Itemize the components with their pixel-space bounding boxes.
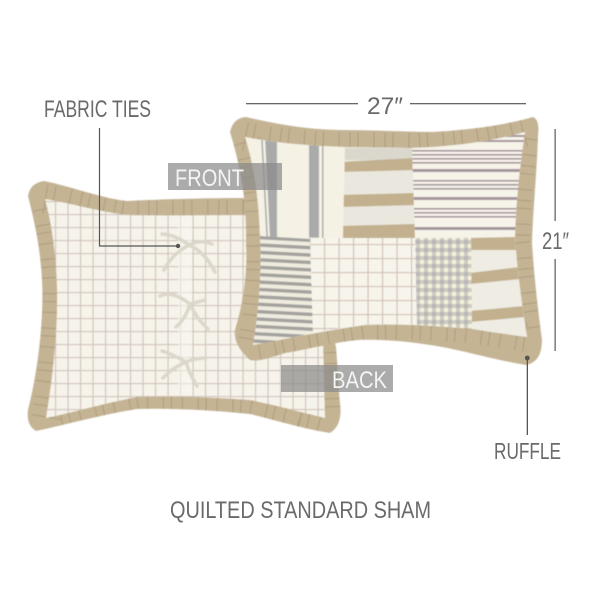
patch base [245,132,527,345]
patch: vertical grey stripes [260,140,340,238]
back pillow [28,181,341,433]
label: back [281,365,393,394]
back ruffle [28,181,341,433]
fabric tie 2 [160,294,208,329]
caption: QUILTED STANDARD SHAM [170,497,431,524]
patch: ticking stripes [253,236,314,344]
back fabric grid [45,199,325,418]
dimension: height 21 inches: 21″ [542,228,569,255]
leader: fabric ties [100,128,180,248]
front ruffle [230,117,542,365]
patch: plaid [310,238,417,333]
back placket [178,216,192,396]
leader: ruffle [525,356,530,435]
fabric tie 1 [162,234,215,272]
label: front [168,163,282,192]
label: front: FRONT [175,165,244,192]
label: fabric ties: FABRIC TIES [44,96,151,123]
dimension: width 27 inches: 27″ [367,93,404,120]
patch: tan wide stripes [470,236,524,336]
patch: tan stripes [342,148,416,238]
front pillow [230,117,542,365]
patch: plum stripes [412,132,525,233]
fabric tie 3 [162,351,206,386]
label: ruffle: RUFFLE [494,438,561,464]
label: back: BACK [332,367,387,394]
patch: gingham [415,238,473,329]
